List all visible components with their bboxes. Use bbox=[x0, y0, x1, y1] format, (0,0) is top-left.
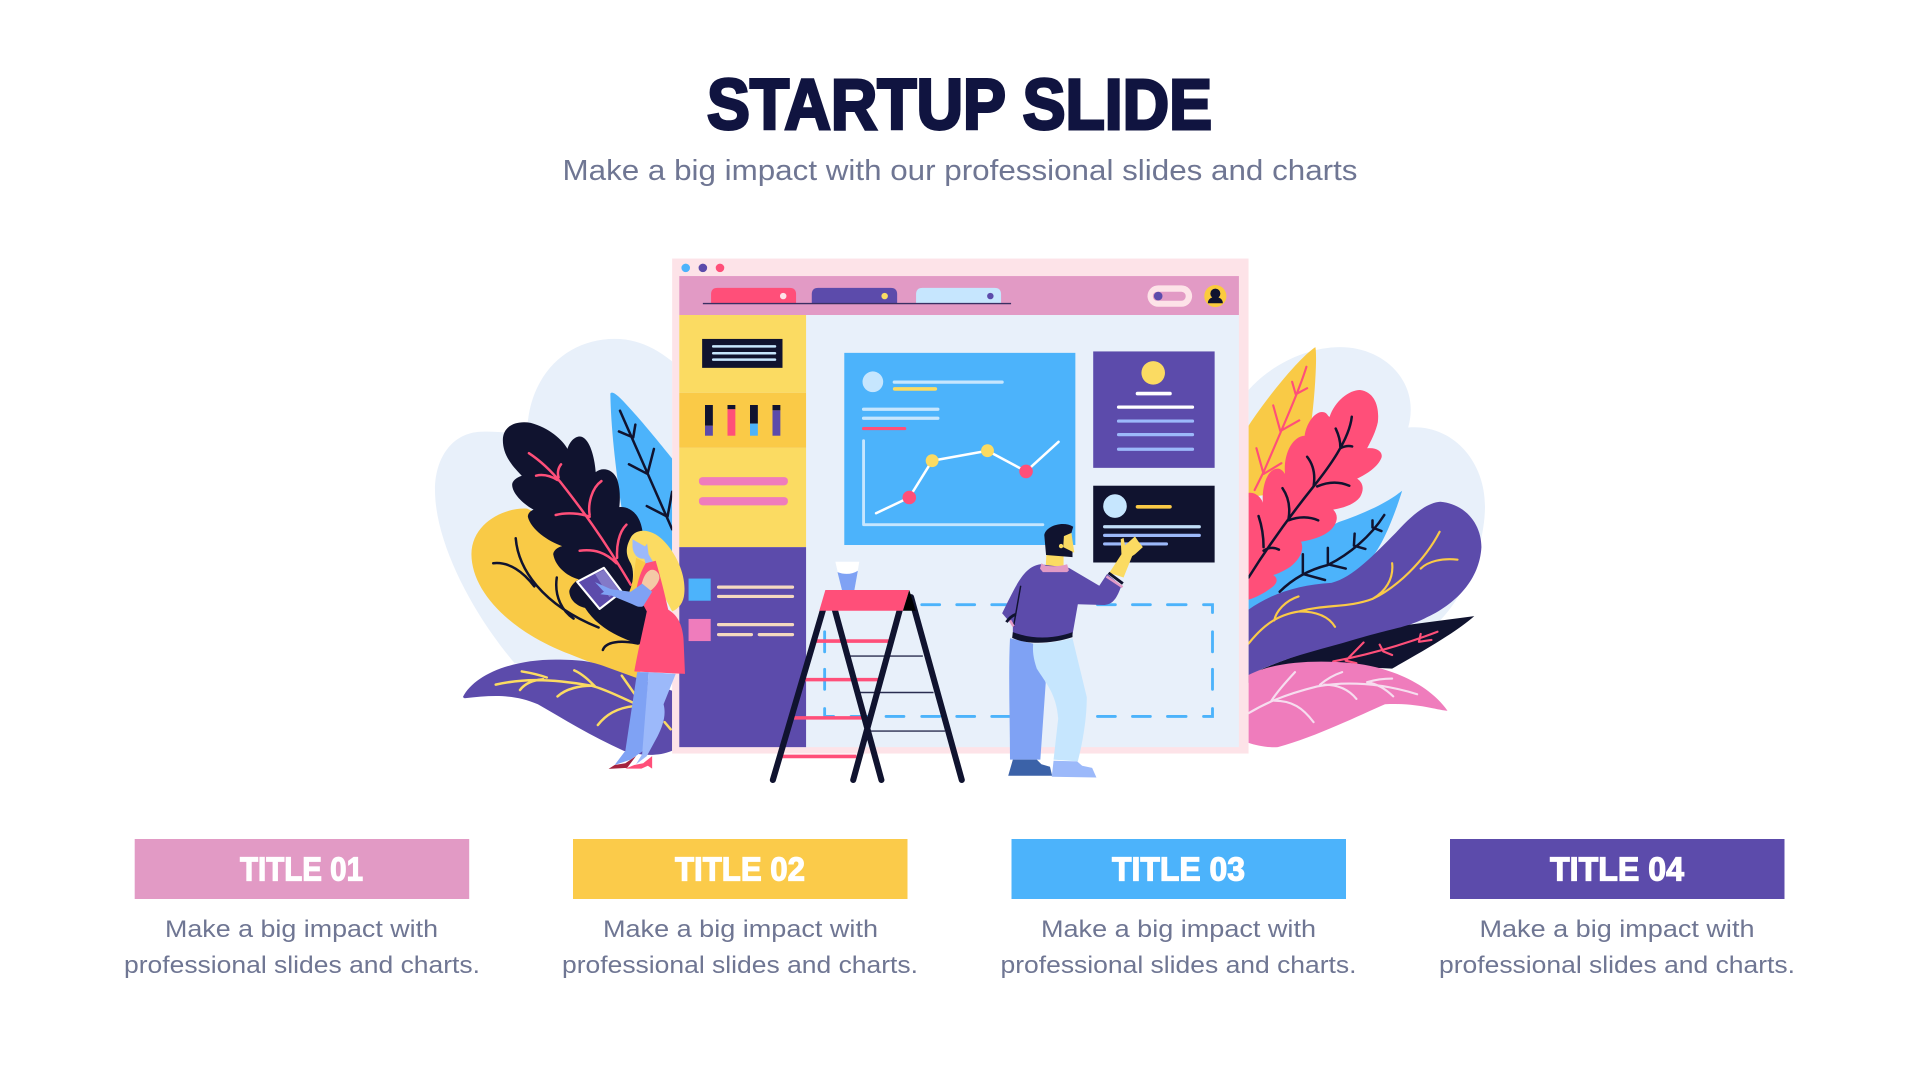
window content background bbox=[679, 315, 1239, 747]
window frame bbox=[672, 259, 1249, 754]
left dark leaf bbox=[503, 422, 652, 647]
left blue leaf bbox=[610, 393, 672, 561]
title 03 label: TITLE 03 bbox=[1112, 850, 1245, 888]
right purple leaf bbox=[1249, 502, 1481, 676]
card: title 04 bbox=[1439, 839, 1795, 979]
header bar bbox=[679, 276, 1239, 315]
title 01 bar bbox=[135, 839, 469, 899]
face bbox=[632, 539, 654, 564]
shoes bbox=[609, 756, 636, 769]
hair bbox=[627, 531, 685, 611]
man pointing at board bbox=[1002, 524, 1143, 777]
chart line bbox=[876, 442, 1059, 513]
ear bbox=[1059, 544, 1063, 548]
title 03 description: professional slides and charts. bbox=[1000, 952, 1356, 979]
title: STARTUP SLIDE bbox=[707, 66, 1212, 145]
tablet bbox=[577, 568, 622, 609]
toggle switch bbox=[1147, 285, 1192, 307]
browser window bbox=[672, 259, 1249, 754]
right side leaves bbox=[1249, 347, 1481, 747]
ladder bbox=[773, 562, 962, 780]
title 01 description: Make a big impact with bbox=[165, 916, 438, 943]
icon: user avatar bbox=[1204, 285, 1226, 307]
right yellow leaf bbox=[1249, 347, 1316, 497]
chart axes bbox=[864, 441, 1043, 525]
sidebar list bbox=[689, 579, 792, 641]
legs bbox=[615, 672, 649, 765]
sweater bbox=[1002, 564, 1121, 640]
right blue leaf bbox=[1249, 491, 1402, 611]
shoes bbox=[1008, 760, 1052, 776]
head: hair and beard bbox=[1044, 524, 1073, 557]
collar bbox=[1040, 563, 1069, 572]
purple profile card bbox=[1093, 351, 1215, 468]
sweater hem and details bbox=[1012, 632, 1072, 643]
title 02 description: Make a big impact with bbox=[603, 916, 878, 943]
title 02 bar bbox=[573, 839, 908, 899]
upper arm bbox=[641, 570, 659, 591]
title 03 description: Make a big impact with bbox=[1041, 916, 1316, 943]
tabs bbox=[703, 288, 1011, 304]
sidebar text block bbox=[702, 339, 782, 368]
dark info card bbox=[1093, 486, 1215, 562]
right dark leaf bbox=[1249, 616, 1474, 683]
window control dots bbox=[681, 264, 724, 272]
right pink leaf bbox=[1249, 662, 1447, 747]
sidebar pink pills bbox=[699, 477, 788, 505]
forearm sleeve bbox=[595, 582, 652, 607]
illustration: startup dashboard scene bbox=[435, 259, 1485, 780]
neck bbox=[1046, 554, 1064, 567]
title 04 description: professional slides and charts. bbox=[1439, 952, 1795, 979]
woman holding tablet bbox=[577, 531, 685, 769]
trousers bbox=[1009, 638, 1046, 760]
dashed placeholder box bbox=[825, 605, 1212, 716]
card: title 02 bbox=[562, 839, 918, 979]
left purple leaf bbox=[463, 660, 672, 755]
title 01 description: professional slides and charts. bbox=[124, 952, 480, 979]
sidebar bbox=[679, 315, 806, 747]
raised arm and hand bbox=[1109, 536, 1143, 577]
yellow leaf veins bbox=[493, 538, 638, 650]
right background blob bbox=[1249, 347, 1485, 686]
sidebar mini bars bbox=[705, 405, 780, 436]
title 02 label: TITLE 02 bbox=[675, 850, 805, 888]
title 02 description: professional slides and charts. bbox=[562, 952, 918, 979]
card: title 01 bbox=[124, 839, 480, 979]
title 04 label: TITLE 04 bbox=[1550, 850, 1685, 888]
title 04 description: Make a big impact with bbox=[1480, 916, 1754, 943]
left yellow leaf bbox=[471, 508, 649, 680]
right red leaf bbox=[1249, 390, 1382, 600]
title 01 label: TITLE 01 bbox=[240, 850, 363, 888]
subtitle: Make a big impact with our professional slides and charts bbox=[562, 155, 1358, 187]
head: face bbox=[1062, 533, 1074, 552]
left background blob bbox=[435, 339, 672, 663]
blue line chart panel bbox=[844, 353, 1075, 545]
card: title 03 bbox=[1000, 839, 1356, 979]
dress bbox=[634, 561, 685, 674]
title 04 bar bbox=[1450, 839, 1784, 899]
glass of water bbox=[835, 562, 859, 591]
title 03 bar bbox=[1012, 839, 1346, 899]
